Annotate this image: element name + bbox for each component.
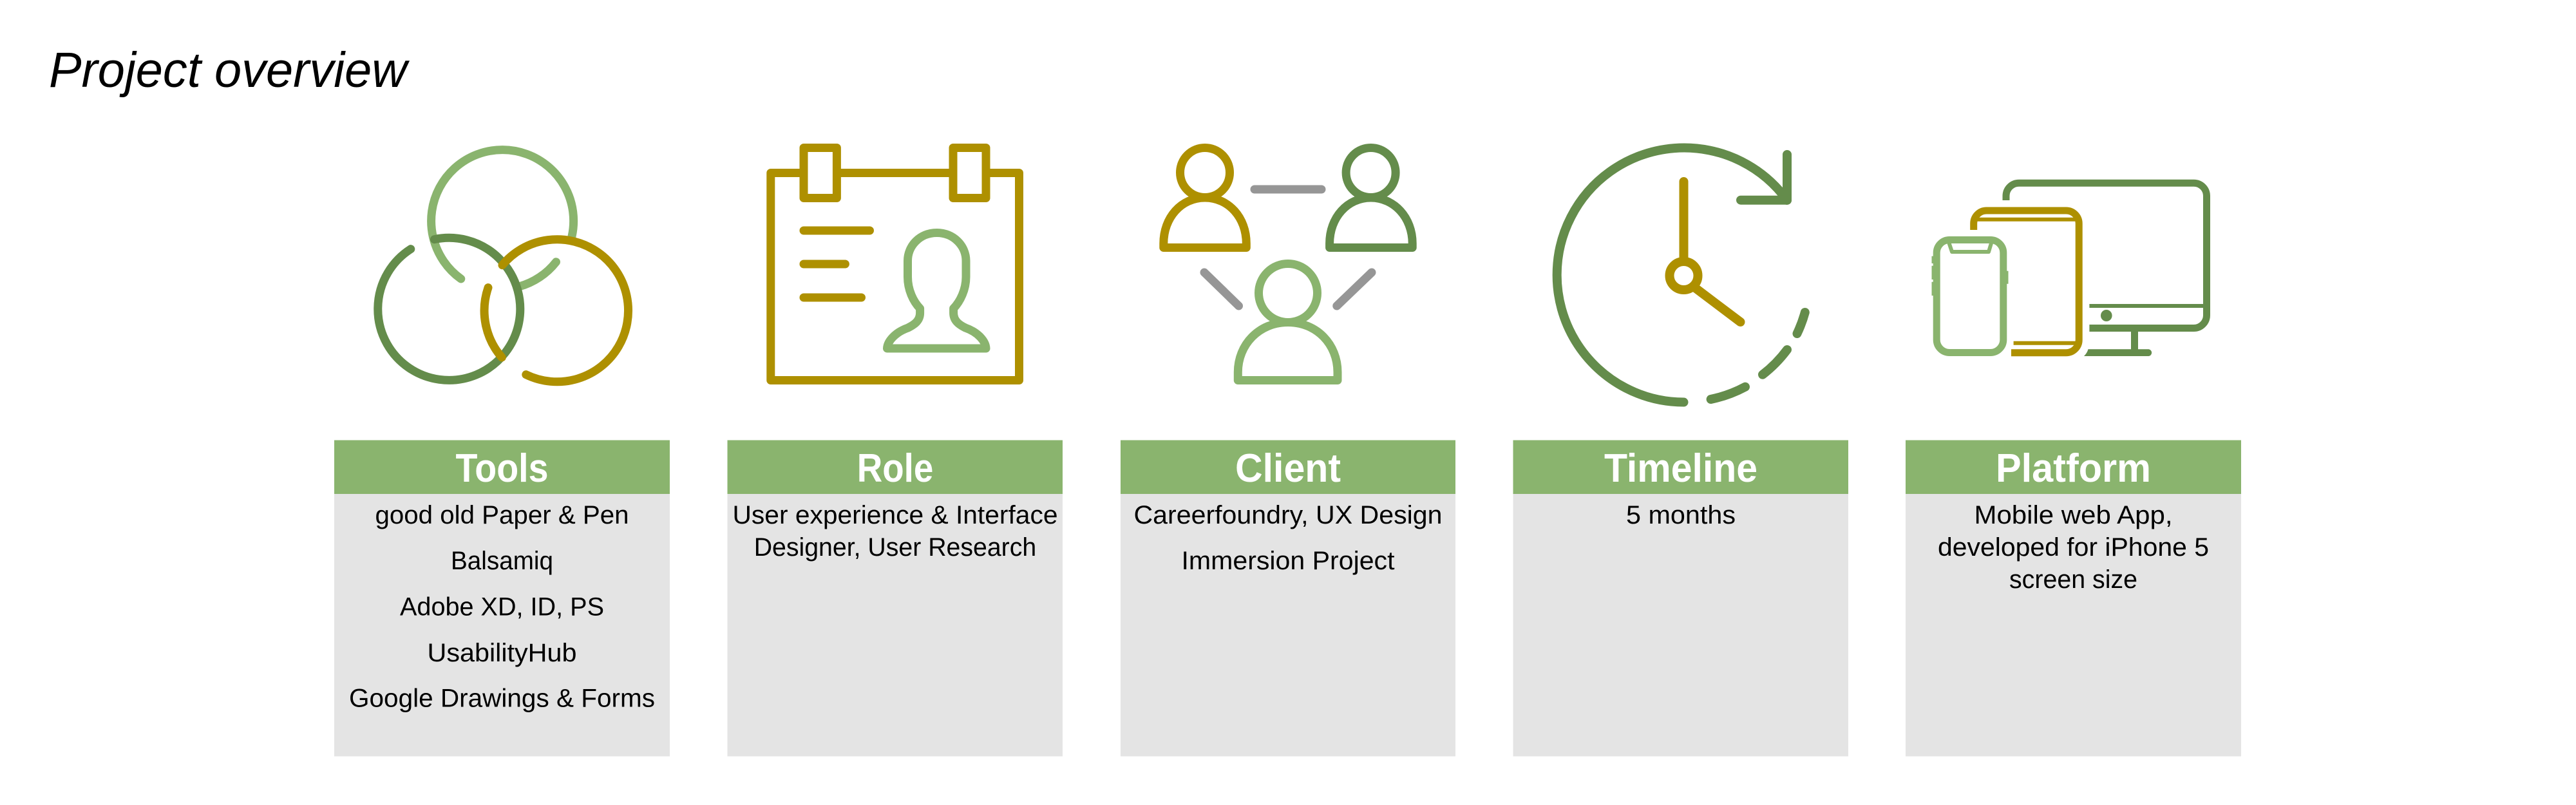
panel: Timeline <box>1513 440 1848 756</box>
title: Project overview <box>49 43 410 98</box>
icon: three interlocking circles <box>378 150 629 382</box>
panel: Role <box>728 440 1063 756</box>
text: tools list: UsabilityHub <box>428 639 577 667</box>
heading: Tools <box>334 440 670 494</box>
heading: Platform <box>1906 440 2241 494</box>
text: tools list: Balsamiq <box>451 547 553 575</box>
text: platform description: screen size <box>2009 565 2137 594</box>
heading: Timeline <box>1513 440 1848 494</box>
icon: ID card with person <box>771 148 1019 380</box>
heading: Tools: Tools <box>456 446 549 491</box>
panel: Tools <box>334 440 670 756</box>
text: tools list: Google Drawings & Forms <box>349 684 655 712</box>
text: client description: Careerfoundry, UX Design <box>1133 501 1443 529</box>
text: role description <box>733 501 1057 562</box>
text: client description <box>1133 501 1443 575</box>
heading: Role <box>728 440 1063 494</box>
text: client description: Immersion Project <box>1181 547 1395 575</box>
text: timeline duration: 5 months <box>1626 501 1736 529</box>
panel: Platform <box>1906 440 2241 756</box>
text: platform description: Mobile web App, <box>1975 501 2173 529</box>
text: role description: User experience & Interface <box>733 501 1057 529</box>
icon: monitor, tablet and phone <box>1932 183 2206 356</box>
heading: Role: Role <box>857 446 933 491</box>
panel: Client <box>1121 440 1455 756</box>
text: tools list: good old Paper & Pen <box>375 501 629 529</box>
heading: Platform: Platform <box>1996 446 2151 491</box>
text: platform description: developed for iPhone 5 <box>1938 533 2209 562</box>
heading: Timeline: Timeline <box>1604 446 1757 491</box>
heading: Client <box>1121 440 1455 494</box>
heading: Client: Client <box>1235 446 1341 491</box>
icon: clock with circular arrow <box>1557 148 1805 402</box>
icon: three connected people <box>1164 148 1412 380</box>
text: tools list: Adobe XD, ID, PS <box>400 592 604 621</box>
text: role description: Designer, User Research <box>754 533 1036 562</box>
text: tools list <box>349 501 655 712</box>
text: platform description <box>1938 501 2209 594</box>
